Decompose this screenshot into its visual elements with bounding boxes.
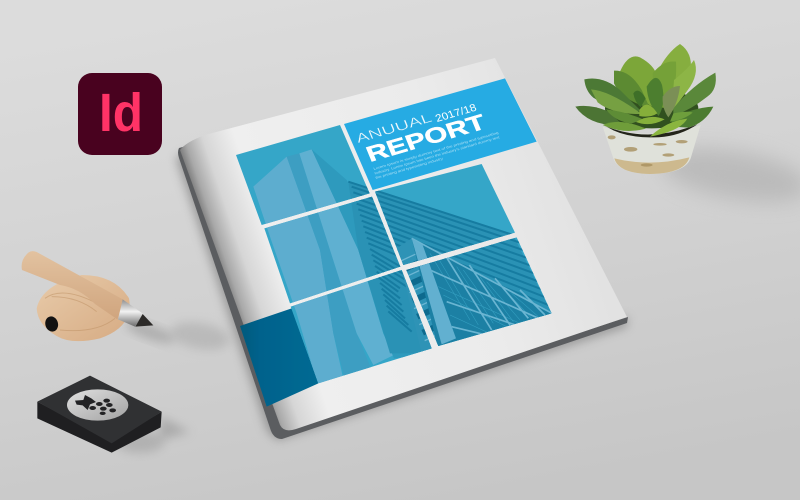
- stone side: [37, 402, 162, 453]
- corner pillar: [412, 238, 456, 344]
- tower side plane: [312, 149, 437, 358]
- dark blue band: [240, 308, 318, 407]
- intro copy: [373, 131, 500, 180]
- potted succulent: [575, 44, 716, 174]
- wood base: [37, 275, 130, 341]
- corner building left face: [397, 238, 442, 353]
- icon: InDesign app badge: Id: [99, 83, 143, 143]
- pot: [603, 124, 701, 174]
- front cover page: [180, 58, 627, 430]
- title text: [353, 103, 500, 180]
- intro copy: Lorem Ipsum is simply dummy text of the printing and typesetting: [373, 131, 499, 171]
- pencil barrel: [22, 251, 124, 319]
- ANUUAL: ANUUAL: [353, 110, 434, 146]
- cover artwork: [233, 78, 557, 407]
- tall tower shadow column: [287, 153, 372, 380]
- intro copy: industry. Lorem Ipsum has been the industry's standard dummy text: [374, 135, 500, 175]
- icon: InDesign app badge: [78, 73, 162, 155]
- disc cutouts: leaf and grapes: [75, 395, 116, 415]
- intro copy: the printing and typesetting industry: [375, 157, 444, 180]
- metal ferrule: [118, 299, 143, 327]
- photo grid: skyscrapers in blue duotone: [233, 123, 557, 387]
- leaves: [575, 44, 716, 137]
- brochure shadow and edge: [176, 145, 628, 440]
- year: 2017/18: [434, 103, 479, 125]
- tall tower lit column: [299, 149, 394, 365]
- stone top: [37, 376, 162, 443]
- wooden pencil holder: [22, 251, 153, 341]
- brochure: [176, 58, 628, 440]
- REPORT: REPORT: [362, 109, 490, 167]
- stone paperweight with metal disc: [37, 376, 162, 453]
- second building in translated detail coordinates: [348, 182, 557, 353]
- corner building pale bands: [402, 254, 435, 342]
- corner building right face windows: [412, 242, 551, 346]
- background shadows: [116, 138, 800, 453]
- metal disc: [67, 389, 128, 421]
- tall tower pale face: [253, 157, 345, 387]
- blue title block: [344, 78, 537, 190]
- striped facade: [348, 182, 557, 353]
- graphite tip: [135, 314, 153, 327]
